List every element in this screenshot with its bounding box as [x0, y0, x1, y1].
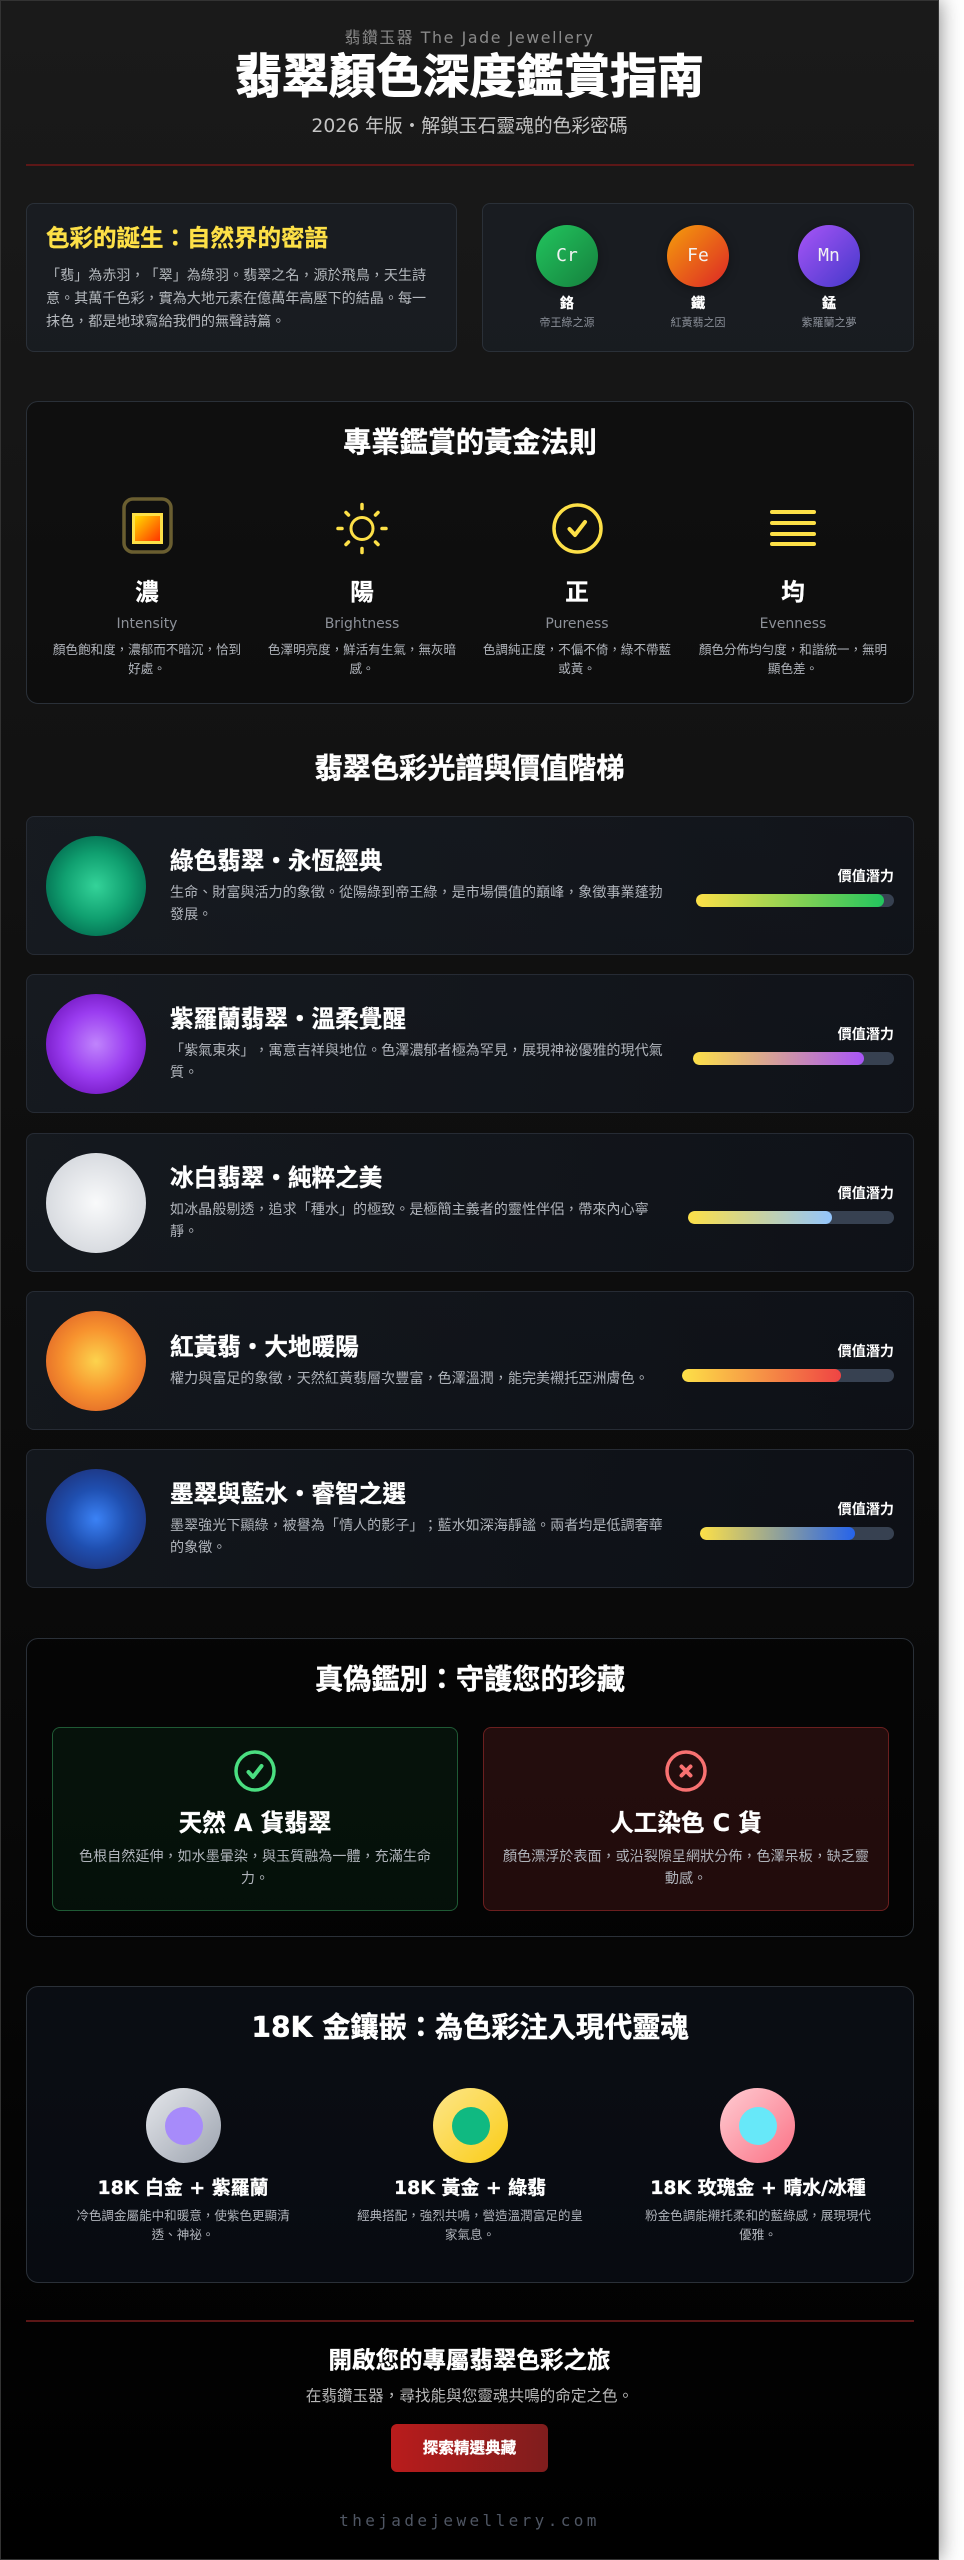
row: lavender jade	[26, 974, 914, 1113]
panel heading: 色彩的誕生：自然界的密語	[46, 224, 328, 252]
row title: 紅黃翡・大地暖陽	[170, 1333, 359, 1361]
button	[391, 2424, 548, 2472]
value label: 價值潛力	[838, 869, 894, 885]
panel heading: 真偽鑑別：守護您的珍藏	[315, 1663, 625, 1696]
row text: 靜。	[170, 1224, 198, 1240]
pairing text: 透、神祕。	[152, 2227, 214, 2242]
rule text: pureness	[483, 642, 671, 676]
panel: golden rules	[26, 401, 914, 704]
swatch: green	[46, 836, 146, 936]
subtitle: 2026 年版・解鎖玉石靈魂的色彩密碼	[311, 116, 628, 137]
icon: brightness sun	[336, 502, 388, 554]
rule text: brightness	[268, 642, 456, 676]
card text	[79, 1848, 431, 1887]
rule label: 正: 正	[565, 578, 589, 606]
footer text: 在翡鑽玉器，尋找能與您靈魂共鳴的命定之色。	[306, 2387, 633, 2405]
title: 翡翠顏色深度鑑賞指南	[235, 50, 704, 105]
row: icy white jade	[26, 1133, 914, 1272]
pairing text: 優雅。	[739, 2227, 777, 2242]
rule text: pureness: 或黃。	[558, 661, 596, 676]
rule label: 濃: 濃	[135, 578, 159, 606]
element: iron: Fe	[687, 245, 709, 266]
pairing title: 18K 黃金 + 綠翡	[394, 2177, 546, 2199]
panel: origin of colour	[26, 203, 457, 352]
element note: chromium: 帝王綠之源	[540, 316, 594, 329]
section heading: spectrum: 翡翠色彩光譜與價值階梯	[314, 752, 625, 785]
pairing text: 經典搭配，強烈共鳴，營造溫潤富足的皇	[357, 2208, 583, 2223]
row: red-yellow jade	[26, 1291, 914, 1430]
stone: green	[452, 2106, 490, 2144]
rule sublabel: Brightness: Brightness	[325, 616, 399, 632]
row text	[170, 1518, 663, 1556]
row text: 墨翠強光下顯綠，被譽為「情人的影子」；藍水如深海靜謐。兩者均是低調奢華	[170, 1518, 663, 1534]
value bar	[688, 1211, 894, 1224]
icon: evenness lines	[770, 510, 816, 546]
pairing text: 粉金色調能襯托柔和的藍綠感，展現現代	[645, 2208, 871, 2223]
pairing text: 冷色調金屬能中和暖意，使紫色更顯清	[76, 2208, 290, 2223]
pairing title: 18K 白金 + 紫羅蘭	[98, 2177, 268, 2199]
card: dyed grade C	[483, 1727, 889, 1911]
panel body text: 意。其萬千色彩，實為大地元素在億萬年高壓下的結晶。每一	[46, 291, 426, 307]
row title: 綠色翡翠・永恆經典	[170, 847, 382, 875]
value label: 價值潛力	[838, 1027, 894, 1043]
card title: 天然 A 貨翡翠	[179, 1809, 331, 1837]
rule sublabel: Evenness: Evenness	[760, 616, 826, 632]
row text: 發展。	[170, 907, 212, 923]
panel: colour elements	[482, 203, 914, 352]
swatch: orange	[46, 1311, 146, 1411]
card text: 顏色漂浮於表面，或沿裂隙呈網狀分佈，色澤呆板，缺乏靈	[503, 1849, 869, 1865]
value bar	[700, 1527, 894, 1540]
value label: 價值潛力	[838, 1344, 894, 1360]
button: 探索精選典藏	[423, 2439, 516, 2457]
rule label: 陽: 陽	[350, 578, 374, 606]
header divider	[26, 164, 914, 166]
brand line: 翡鑽玉器 The Jade Jewellery	[345, 28, 594, 47]
element: iron	[667, 225, 729, 287]
element name: iron: 鐵	[691, 296, 705, 312]
row text: 生命、財富與活力的象徵。從陽綠到帝王綠，是市場價值的巔峰，象徵事業蓬勃	[170, 885, 663, 901]
value bar	[693, 1052, 894, 1065]
rule text: intensity: 顏色飽和度，濃郁而不暗沉，恰到	[53, 642, 241, 657]
card text: 色根自然延伸，如水墨暈染，與玉質融為一體，充滿生命	[79, 1849, 431, 1865]
element name: chromium: 鉻	[560, 296, 574, 312]
row text: 的象徵。	[170, 1540, 226, 1556]
rule text: intensity	[53, 642, 241, 676]
website url: thejadejewellery.com	[339, 2511, 600, 2530]
stone: lavender	[164, 2106, 202, 2144]
element: manganese: Mn	[818, 245, 840, 266]
row text: 如冰晶般剔透，追求「種水」的極致。是極簡主義者的靈性伴侶，帶來內心寧	[170, 1202, 649, 1218]
element: manganese	[798, 225, 860, 287]
row text	[170, 884, 663, 923]
element: chromium	[536, 225, 598, 287]
swatch: blue	[46, 1469, 146, 1569]
row title: 紫羅蘭翡翠・溫柔覺醒	[170, 1005, 406, 1033]
row text	[170, 1202, 649, 1240]
icon: check	[234, 1750, 276, 1792]
rule text: brightness: 感。	[349, 661, 375, 676]
pairing title: 18K 玫瑰金 + 晴水/冰種	[650, 2177, 866, 2199]
stone: ice	[738, 2106, 776, 2144]
row: ink and blue jade	[26, 1449, 914, 1588]
row title: 墨翠與藍水・睿智之選	[170, 1480, 406, 1508]
swatch: yellow gold and green	[433, 2088, 508, 2163]
rule sublabel: Pureness: Pureness	[545, 616, 609, 632]
card text: 力。	[241, 1871, 269, 1887]
pairing text	[645, 2208, 871, 2242]
element name: manganese: 錳	[822, 296, 836, 312]
card title: 人工染色 C 貨	[610, 1809, 762, 1837]
row title: 冰白翡翠・純粹之美	[170, 1164, 382, 1192]
panel body text: 抹色，都是地球寫給我們的無聲詩篇。	[46, 314, 285, 330]
element: chromium: Cr	[556, 245, 578, 266]
panel body text	[46, 268, 426, 330]
value bar	[682, 1369, 894, 1382]
row text: 質。	[170, 1065, 198, 1081]
panel body text: 「翡」為赤羽，「翠」為綠羽。翡翠之名，源於飛鳥，天生詩	[46, 268, 426, 284]
rule text: evenness: 顯色差。	[768, 661, 818, 676]
card text	[503, 1848, 869, 1887]
footer heading: 開啟您的專屬翡翠色彩之旅	[328, 2346, 610, 2374]
icon: intensity	[122, 497, 173, 554]
rule text: brightness: 色澤明亮度，鮮活有生氣，無灰暗	[268, 642, 456, 657]
rule sublabel: Intensity: Intensity	[117, 616, 177, 632]
row: green jade	[26, 816, 914, 955]
row text	[170, 1042, 663, 1081]
card text: 動感。	[665, 1871, 707, 1887]
element note: manganese: 紫羅蘭之夢	[802, 316, 856, 329]
pairing text	[76, 2208, 290, 2242]
panel: 18K settings	[26, 1986, 914, 2283]
icon: cross	[665, 1750, 707, 1792]
value bar	[696, 894, 894, 907]
pairing text	[357, 2208, 583, 2242]
swatch: purple	[46, 994, 146, 1094]
row text: 權力與富足的象徵，天然紅黃翡層次豐富，色澤溫潤，能完美襯托亞洲膚色。	[170, 1371, 649, 1387]
row text: 「紫氣東來」，寓意吉祥與地位。色澤濃郁者極為罕見，展現神祕優雅的現代氣	[170, 1043, 663, 1059]
value label: 價值潛力	[838, 1186, 894, 1202]
panel: authenticity	[26, 1638, 914, 1937]
rule text: evenness: 顏色分佈均勻度，和諧統一，無明	[699, 642, 887, 657]
swatch: rose gold and ice	[720, 2088, 795, 2163]
rule text: pureness: 色調純正度，不偏不倚，綠不帶藍	[483, 642, 671, 657]
rule text: evenness	[699, 642, 887, 676]
element note: iron: 紅黃翡之因	[670, 316, 726, 329]
footer divider	[26, 2320, 914, 2322]
pairing text: 家氣息。	[445, 2227, 495, 2242]
panel heading: 專業鑑賞的黃金法則	[343, 426, 597, 459]
rule text: intensity: 好處。	[128, 661, 166, 676]
swatch: white	[46, 1153, 146, 1253]
rule label: 均: 均	[781, 578, 805, 606]
icon: pureness check	[552, 503, 603, 554]
card: natural grade A	[52, 1727, 458, 1911]
value label: 價值潛力	[838, 1502, 894, 1518]
panel heading: 18K 金鑲嵌：為色彩注入現代靈魂	[251, 2011, 689, 2044]
swatch: white gold and lavender	[146, 2088, 221, 2163]
